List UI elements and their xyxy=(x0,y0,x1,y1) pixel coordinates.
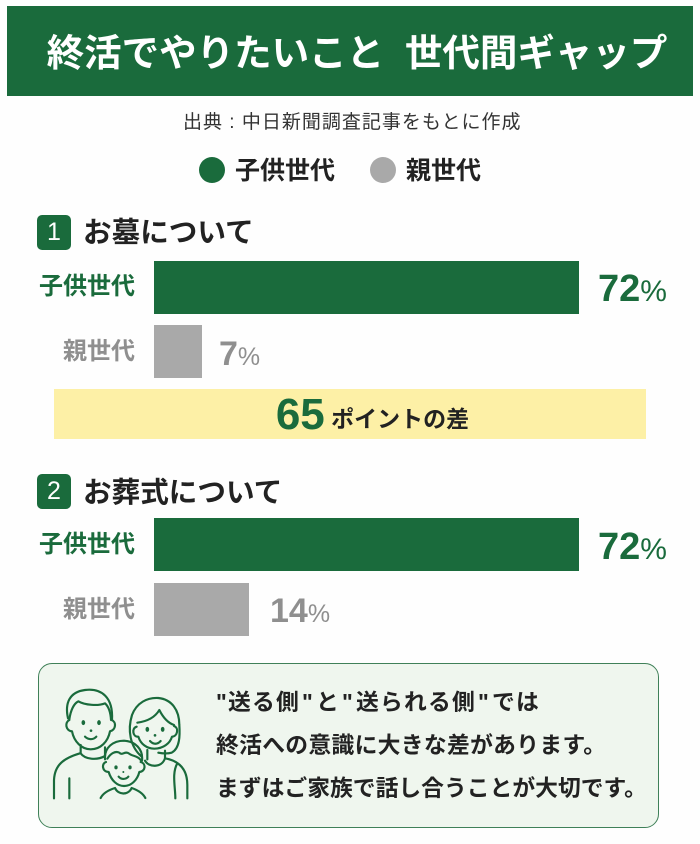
section 2 badge xyxy=(37,474,71,509)
bar: parents 14% xyxy=(154,583,249,636)
title banner xyxy=(7,6,693,96)
section 1 badge xyxy=(37,215,71,250)
source note: 出典 : 中日新聞調査記事をもとに作成 xyxy=(183,112,521,133)
label: children 1: 子供世代 xyxy=(39,273,135,300)
callout: 65 point gap: 65 ポイントの差 xyxy=(276,390,469,439)
value: 72%: 72% xyxy=(598,526,667,568)
message text xyxy=(216,688,647,800)
child xyxy=(100,740,145,798)
title banner: 終活でやりたいこと 世代間ギャップ xyxy=(47,32,667,74)
section 1 badge: 1 xyxy=(47,218,61,246)
bar: parents 7% xyxy=(154,325,202,378)
label: parents 1: 親世代 xyxy=(63,338,135,365)
value: 7%: 7% xyxy=(219,335,260,373)
message text: "送る側"と"送られる側"では xyxy=(216,688,540,714)
legend xyxy=(199,157,481,185)
label: children 2: 子供世代 xyxy=(39,531,135,558)
legend label: parents: 親世代 xyxy=(406,157,481,185)
section 2 badge: 2 xyxy=(47,477,61,505)
section 2 heading: お葬式について xyxy=(83,477,282,509)
bar: children 72% xyxy=(154,518,579,571)
callout: 65 point gap xyxy=(54,389,646,439)
message text: まずはご家族で話し合うことが大切です。 xyxy=(216,774,647,800)
bar: children 72% xyxy=(154,261,579,314)
legend label: children: 子供世代 xyxy=(235,157,335,185)
label: parents 2: 親世代 xyxy=(63,596,135,623)
legend dot: parents xyxy=(370,157,396,183)
legend dot: children xyxy=(199,157,225,183)
father xyxy=(54,689,115,798)
value: 14%: 14% xyxy=(270,592,330,630)
panel: message xyxy=(38,663,659,828)
section 1 heading: お墓について xyxy=(83,217,254,249)
icon: family xyxy=(52,688,188,800)
value: 72%: 72% xyxy=(598,268,667,310)
mother xyxy=(129,697,187,798)
message text: 終活への意識に大きな差があります。 xyxy=(216,732,606,758)
